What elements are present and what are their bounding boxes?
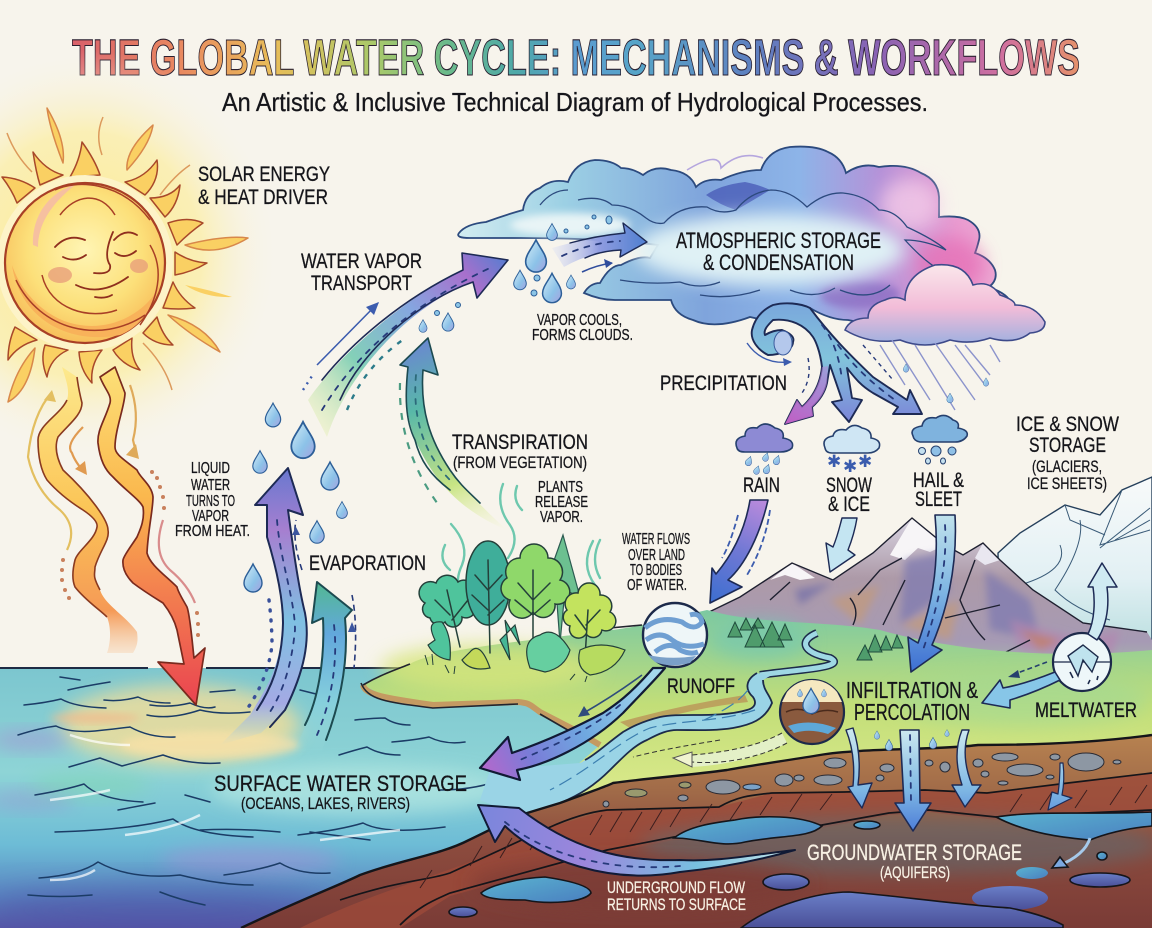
- label: snow and ice: [826, 474, 872, 516]
- note: underground flow: UNDERGROUND FLOW: [607, 878, 745, 897]
- bushes: [428, 620, 625, 675]
- arrow: rain to runoff: [710, 500, 770, 603]
- label: snow and ice: SNOW: [826, 474, 872, 497]
- deep cloud bumps: [706, 182, 770, 210]
- ocean: [0, 668, 720, 928]
- mountains and glaciers: [707, 477, 1152, 690]
- note: underground flow: RETURNS TO SURFACE: [607, 895, 746, 914]
- note: plants release vapor: RELEASE: [535, 494, 588, 511]
- icon: sun: [0, 108, 248, 402]
- label: surface water storage: SURFACE WATER STORAGE: [214, 771, 467, 796]
- label: surface water storage: [214, 771, 467, 813]
- forest: [419, 484, 625, 682]
- soil cross-section: [241, 735, 1152, 928]
- label: hail and sleet: [913, 469, 964, 511]
- note: water flows over land: WATER FLOWS: [622, 531, 690, 548]
- label: atmospheric storage: & CONDENSATION: [703, 250, 854, 275]
- arrow: hail to infiltration: [908, 515, 955, 672]
- note: liquid water: TURNS TO: [186, 493, 235, 510]
- heat waves from the sun: [28, 367, 205, 705]
- glaciers: [998, 477, 1152, 660]
- fir tree: [540, 535, 580, 643]
- waves: [18, 677, 495, 905]
- arrow: meltwater to glacier: [1088, 563, 1117, 640]
- label: infiltration and percolation: INFILTRATION &: [846, 677, 978, 703]
- label: runoff: RUNOFF: [667, 675, 735, 698]
- arrow: snow to mountains: [826, 518, 857, 572]
- note: liquid water: LIQUID: [191, 460, 230, 477]
- island shore: [363, 685, 600, 745]
- right heat arrow: [98, 367, 205, 705]
- cloud contour lines: [540, 190, 946, 297]
- note: liquid water: VAPOR: [192, 508, 229, 525]
- stones: [603, 753, 1121, 807]
- vapor wisps: [442, 484, 600, 590]
- small heat flow arrows: [28, 392, 71, 550]
- icon: hail cloud: [912, 415, 967, 464]
- arrow: water vapor transport: [303, 253, 508, 437]
- land tint patches: [380, 620, 1150, 728]
- note: plants release vapor: VAPOR.: [540, 509, 583, 526]
- note: water flows over land: OF WATER.: [627, 577, 687, 594]
- label: infiltration and percolation: PERCOLATION: [854, 699, 970, 725]
- sun face: [55, 232, 137, 298]
- river: [480, 633, 834, 815]
- label: atmospheric storage: [676, 228, 881, 275]
- arrow: transpiration: [400, 338, 507, 530]
- swirl centre: [774, 331, 792, 355]
- label: transpiration: (FROM VEGETATION): [453, 453, 587, 472]
- label: hail and sleet: HAIL &: [913, 469, 964, 492]
- arrow: runoff to sea: [480, 668, 665, 780]
- subtitle: An Artistic & Inclusive Technical Diagram of Hydrological Processes.: [222, 87, 928, 117]
- note: water flows over land: OVER LAND: [628, 547, 685, 564]
- arrows: percolation into soil: [846, 728, 1072, 831]
- note: plants release vapor: [535, 479, 588, 526]
- label: ice and snow storage: (GLACIERS,: [1032, 457, 1102, 476]
- vapor condensation droplets: [514, 215, 612, 303]
- label: surface water storage: (OCEANS, LAKES, RIVERS): [241, 794, 410, 813]
- label: ice and snow storage: ICE & SNOW: [1016, 413, 1119, 436]
- hatch marks: [420, 785, 1147, 888]
- small fir stands: [728, 618, 903, 660]
- label: ice and snow storage: ICE SHEETS): [1027, 474, 1107, 493]
- note: liquid water: FROM HEAT.: [175, 523, 250, 540]
- sun rays: [2, 108, 248, 402]
- note: vapor cools: [532, 312, 633, 344]
- icon: runoff circle: [643, 603, 707, 667]
- label: transpiration: [452, 431, 588, 472]
- icon: snow cloud: [824, 425, 880, 476]
- aquifers: [449, 812, 1152, 928]
- panel: surface evaporation flows: [220, 403, 356, 760]
- red hatched layer: [300, 773, 1152, 928]
- label: groundwater storage: GROUNDWATER STORAGE: [807, 840, 1022, 865]
- label: groundwater storage: [807, 840, 1022, 882]
- label: atmospheric storage: ATMOSPHERIC STORAGE: [676, 228, 881, 253]
- label: snow and ice: & ICE: [828, 493, 870, 516]
- note: water flows over land: [622, 531, 690, 594]
- icon: infiltration circle: [780, 680, 844, 744]
- label: water vapor transport: [301, 250, 422, 295]
- clouds: [458, 147, 1045, 410]
- sun glow: [0, 50, 280, 460]
- arrow: underground flow: [478, 805, 795, 875]
- label: groundwater storage: (AQUIFERS): [880, 863, 950, 882]
- icon: rain cloud: [736, 424, 793, 475]
- icon: snow cloud: ✱: [827, 452, 841, 471]
- label: rain: RAIN: [743, 474, 780, 497]
- main cloud body: [458, 147, 1010, 330]
- big evaporation arrow: [220, 468, 307, 745]
- arrow: meltwater to infiltration: [982, 662, 1060, 708]
- rain streaks: [880, 340, 1000, 410]
- label: water vapor transport: WATER VAPOR: [301, 250, 422, 273]
- note: vapor cools: FORMS CLOUDS.: [532, 327, 633, 344]
- left heat band: [38, 367, 138, 653]
- note: water flows over land: TO BODIES: [630, 562, 682, 579]
- note: liquid water: [175, 460, 250, 540]
- arrow: precipitation branches: [747, 303, 922, 424]
- label: precipitation: PRECIPITATION: [660, 372, 787, 395]
- label: hail and sleet: SLEET: [915, 488, 962, 511]
- trunks: [435, 560, 600, 658]
- icon: snow cloud: ✱: [843, 457, 857, 476]
- small evaporation helpers: [295, 520, 356, 668]
- label: solar energy: & HEAT DRIVER: [198, 186, 328, 209]
- icon: snow cloud: ✱: [858, 452, 872, 471]
- label: ice and snow storage: STORAGE: [1029, 434, 1106, 457]
- label: solar energy: [198, 163, 330, 209]
- arrow: dashed land flow: [633, 733, 787, 767]
- arrow: vapor into cloud: [552, 223, 647, 272]
- note: underground flow: [607, 878, 746, 914]
- note: plants release vapor: PLANTS: [538, 479, 583, 496]
- label: water vapor transport: TRANSPORT: [311, 272, 412, 295]
- second evaporation arrow: [288, 582, 352, 760]
- front pink cloud: [845, 265, 1045, 345]
- label: transpiration: TRANSPIRATION: [452, 431, 588, 454]
- tree canopies: [419, 575, 475, 627]
- mountain range: [707, 518, 1152, 690]
- horizon line: [0, 667, 410, 669]
- cloud light centre: [635, 214, 905, 286]
- note: vapor cools: VAPOR COOLS,: [537, 312, 622, 329]
- rain branch tint: [785, 366, 828, 424]
- label: ice and snow storage: [1016, 413, 1119, 493]
- label: infiltration and percolation: [846, 677, 978, 725]
- label: evaporation: EVAPORATION: [309, 552, 426, 575]
- label: solar energy: SOLAR ENERGY: [198, 163, 330, 186]
- icon: meltwater iceberg circle: [1053, 633, 1111, 691]
- water droplets: [244, 403, 347, 592]
- note: liquid water: WATER: [191, 477, 230, 494]
- land: [363, 610, 1152, 830]
